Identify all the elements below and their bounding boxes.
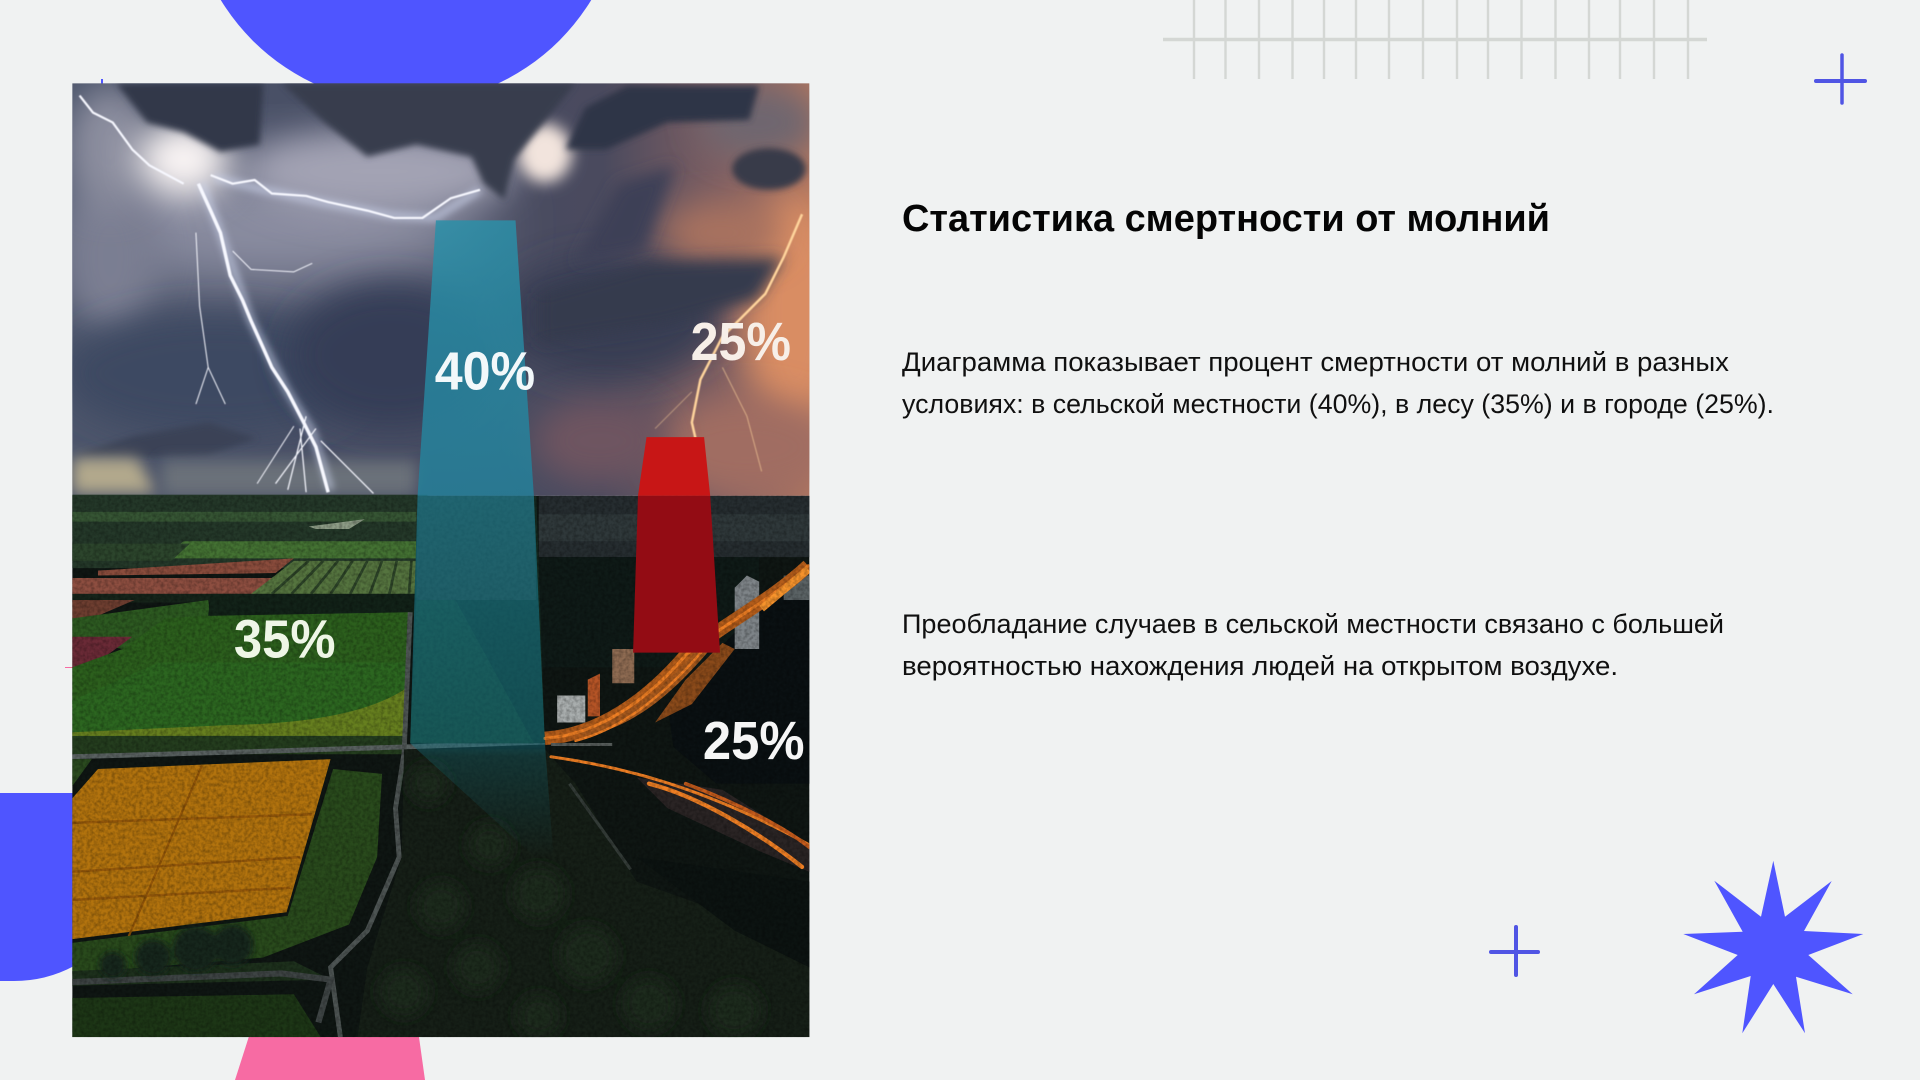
icon: plus bottom <box>1491 927 1538 975</box>
sky <box>61 83 847 498</box>
title: Статистика смертности от молний <box>902 198 1550 240</box>
lightning glow <box>202 178 480 490</box>
decorative blue shape left <box>0 793 74 981</box>
road <box>72 742 545 757</box>
decorative grid top right <box>1163 0 1707 79</box>
grass <box>72 769 382 973</box>
chart bar: rural 40 percent <box>410 220 553 857</box>
town horizon <box>539 496 809 557</box>
text block: rural prevalence explanation <box>902 609 1724 681</box>
value label: 40 percent: 40% <box>435 341 535 401</box>
text block: diagram description: Диаграмма показывает процент смертности от молний в разных <box>902 347 1729 377</box>
tree blobs <box>99 924 253 978</box>
value label: 25 percent sky: 25% <box>691 312 791 372</box>
decorative pink tick <box>65 667 74 668</box>
dark top clouds <box>116 83 263 152</box>
highway lights <box>637 778 809 872</box>
lightning bolts <box>80 96 480 493</box>
far fields <box>72 495 427 568</box>
value label: 25 percent city: 25% <box>703 711 804 771</box>
ground base <box>72 496 809 1037</box>
buildings <box>735 576 759 649</box>
green fields <box>72 637 132 667</box>
striped field <box>251 561 416 594</box>
decorative blue circle top <box>189 0 623 104</box>
text block: diagram description: условиях: в сельской местности (40%), в лесу (35%) и в городе (25%). <box>902 389 1774 419</box>
decorative plus hidden behind photo <box>101 79 103 85</box>
value label: 35 percent: 35% <box>234 610 336 670</box>
icon: eight pointed star <box>1683 861 1863 1033</box>
orange crop field <box>72 759 331 939</box>
text block: rural prevalence explanation: вероятностью нахождения людей на открытом воздухе. <box>902 651 1618 681</box>
icon: plus top right <box>1816 55 1865 103</box>
ground grain <box>72 496 809 1037</box>
forest <box>358 749 809 1037</box>
decorative pink shape bottom <box>235 1030 425 1080</box>
text block: rural prevalence explanation: Преобладание случаев в сельской местности связано с большей <box>902 609 1724 639</box>
chart bar: city 25 percent <box>633 437 720 653</box>
tree line <box>208 594 416 616</box>
panel: storm photo with chart overlay <box>61 83 847 1038</box>
text block: diagram description <box>902 347 1774 419</box>
